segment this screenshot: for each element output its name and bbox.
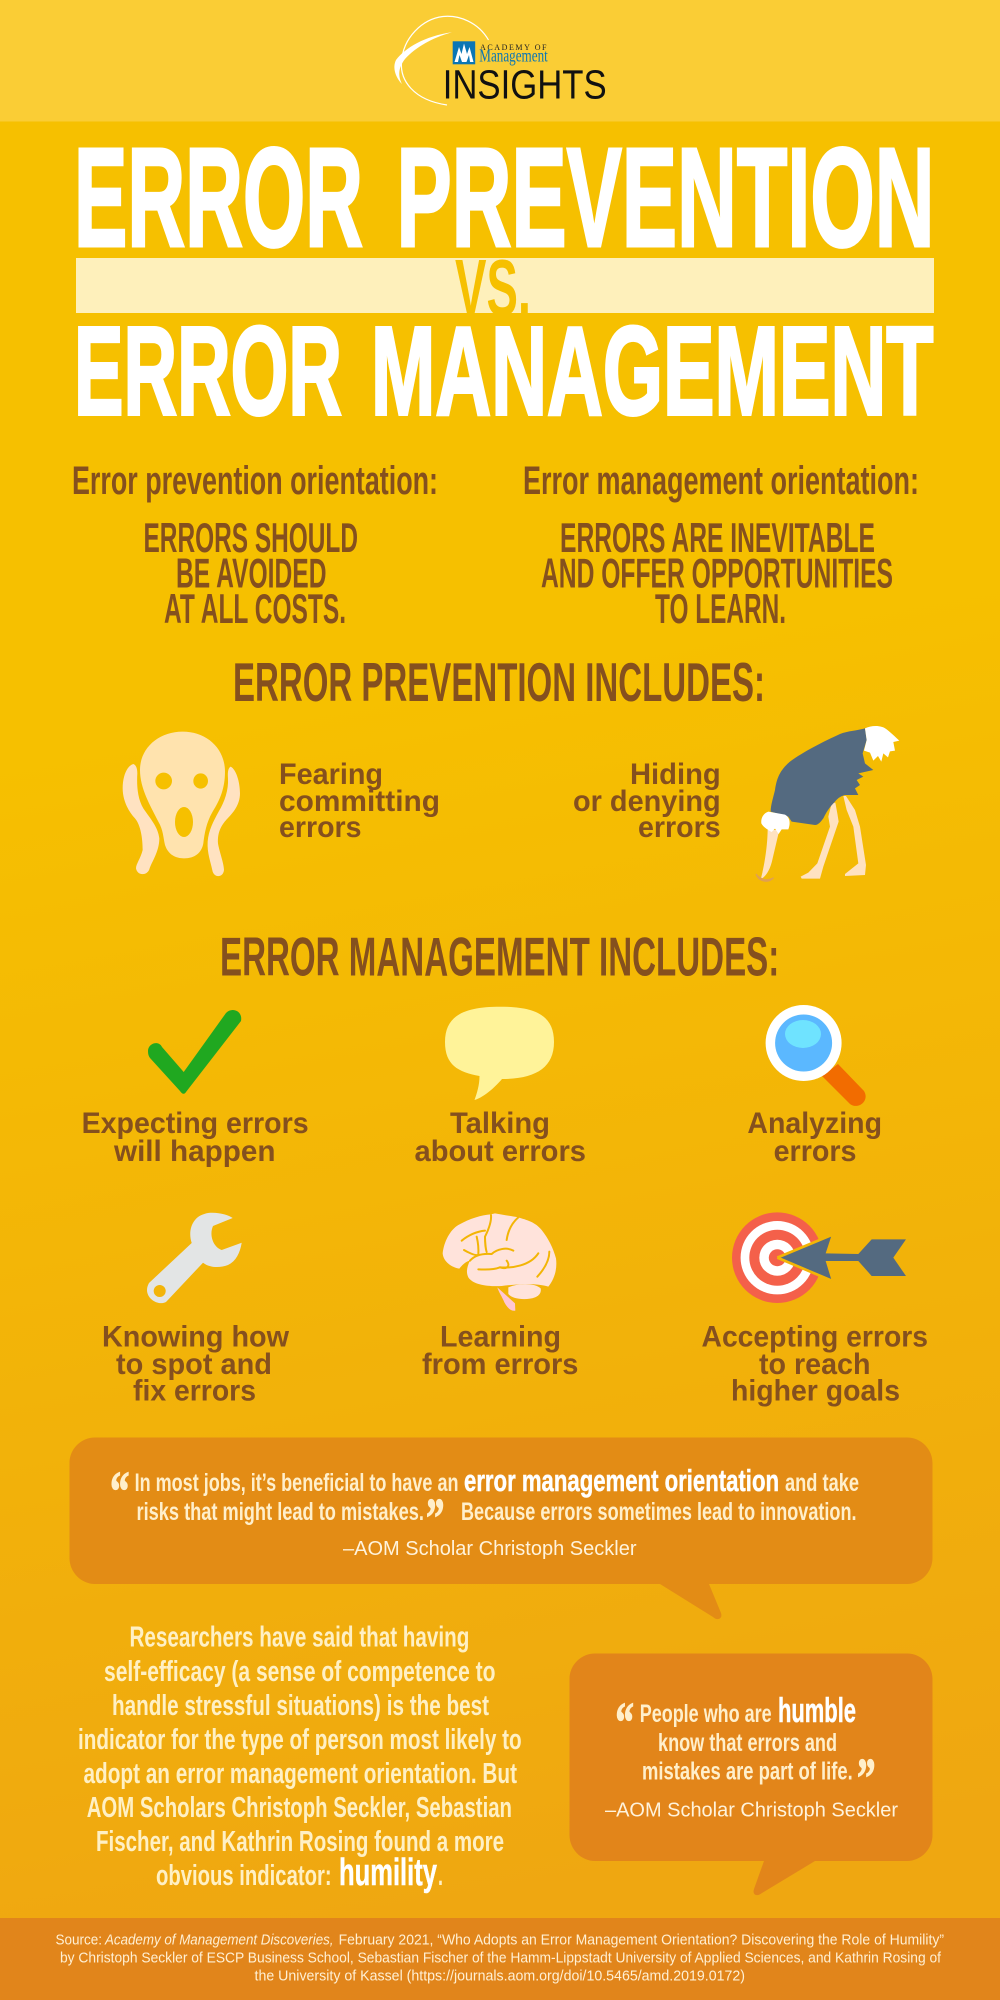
quote text: error management orientation (464, 1463, 779, 1498)
item: talking about errors (414, 1107, 586, 1168)
quote text: humble (778, 1692, 856, 1730)
icon: check mark (148, 1010, 241, 1094)
quote text: People who are (640, 1700, 772, 1728)
text: hiding or denying errors (573, 758, 721, 844)
quote text: ” (857, 1748, 876, 1810)
icon: magnifying glass (766, 1005, 866, 1106)
title: ERROR (74, 300, 342, 442)
orientation: error prevention: BE AVOIDED (176, 550, 326, 596)
item: analyzing errors: Analyzing (747, 1107, 882, 1140)
quote text (110, 1461, 859, 1550)
footer: source: Source: (56, 1932, 102, 1949)
orientation: error prevention: ERRORS SHOULD (144, 514, 358, 561)
item: accepting errors to reach higher goals: higher goals (731, 1375, 900, 1408)
quote text: know that errors and (658, 1729, 837, 1757)
footer: source: by Christoph Seckler of ESCP Business School, Sebastian Fischer of the Hamm-Lippstadt University of Applied Sciences, and Kathrin Rosing of (60, 1950, 942, 1967)
footer: source: the University of Kassel (https://journals.aom.org/doi/10.5465/amd.2019.0172) (254, 1968, 745, 1984)
logo wordmark: Management (479, 46, 548, 66)
icon: speech bubble (445, 1007, 554, 1100)
logo wordmark: ACADEMY OF (480, 43, 547, 52)
icon: ostrich with head in sand (756, 726, 899, 881)
quote text: ” (426, 1488, 444, 1550)
quote text: “ (110, 1461, 130, 1523)
icon: screaming face (123, 732, 240, 876)
quote text: In most jobs, it’s beneficial to have an (135, 1469, 458, 1497)
quote text: Because errors sometimes lead to innovation. (461, 1498, 856, 1526)
quote text: and take (785, 1469, 859, 1497)
item: learning from errors: Learning (440, 1321, 561, 1354)
header band with logo (0, 0, 1000, 122)
orientation: error prevention: AT ALL COSTS. (164, 585, 346, 632)
text: hiding or denying errors: Hiding (630, 758, 721, 791)
text block: researchers paragraph: indicator for the type of person most likely to (78, 1724, 522, 1756)
text: hiding or denying errors: or denying (573, 785, 721, 818)
item: talking about errors: Talking (450, 1107, 550, 1140)
item: accepting errors to reach higher goals: Accepting errors (702, 1321, 928, 1354)
text block: researchers paragraph: adopt an error management orientation. But (84, 1758, 517, 1790)
text block: researchers paragraph: Fischer, and Kathrin Rosing found a more (96, 1826, 504, 1858)
text: fearing committing errors (279, 758, 440, 844)
item: analyzing errors (747, 1107, 882, 1168)
orientation: error management: TO LEARN. (655, 585, 786, 632)
text block: researchers paragraph: obvious indicator: (156, 1860, 332, 1892)
quote attribution: –AOM Scholar Christoph Seckler (343, 1537, 637, 1560)
icon: brain (443, 1213, 556, 1311)
title: ERROR (74, 118, 363, 276)
item: analyzing errors: errors (774, 1135, 856, 1168)
icon: target with arrow (732, 1212, 906, 1303)
item: talking about errors: about errors (414, 1135, 586, 1168)
text block: researchers paragraph: . (438, 1860, 443, 1892)
panel: quote bubble two (570, 1654, 932, 1895)
footer: source (0, 1918, 1000, 2000)
item: knowing how to spot and fix errors (102, 1321, 290, 1408)
logo mark (453, 41, 475, 64)
quote text: “ (615, 1692, 634, 1754)
item: learning from errors (422, 1321, 578, 1381)
item: expecting errors: will happen (113, 1135, 276, 1168)
text: fearing committing errors: errors (279, 811, 362, 844)
text block: researchers paragraph: handle stressful situations) is the best (112, 1690, 489, 1722)
item: expecting errors (82, 1107, 309, 1168)
text: fearing committing errors: committing (279, 785, 440, 818)
text block: researchers paragraph: AOM Scholars Christoph Seckler, Sebastian (87, 1792, 512, 1824)
text block: researchers paragraph: self-efficacy (a sense of competence to (104, 1656, 496, 1688)
item: accepting errors to reach higher goals: to reach (759, 1348, 870, 1381)
title (74, 118, 934, 442)
text: hiding or denying errors: errors (638, 811, 721, 844)
item: accepting errors to reach higher goals (702, 1321, 928, 1408)
text block: researchers paragraph (78, 1621, 522, 1894)
quote attribution: –AOM Scholar Christoph Seckler (605, 1799, 898, 1822)
quote text: risks that might lead to mistakes. (136, 1498, 424, 1526)
text block: researchers paragraph: humility (339, 1852, 437, 1894)
orientation: error management (523, 459, 919, 632)
item: knowing how to spot and fix errors: fix errors (133, 1375, 256, 1408)
orientation: error prevention: Error prevention orientation: (72, 459, 438, 503)
text block: researchers paragraph: Researchers have said that having (130, 1621, 469, 1653)
logo wordmark: INSIGHTS (443, 61, 607, 107)
versus band (76, 243, 934, 332)
logo swoosh (394, 16, 488, 105)
footer: source: February 2021, “Who Adopts an Error Management Orientation? Discovering the Role of Humility” (339, 1932, 944, 1949)
versus band: VS. (455, 243, 531, 332)
item: knowing how to spot and fix errors: to spot and (116, 1348, 272, 1381)
quote text (615, 1692, 876, 1810)
panel: quote bubble one (70, 1438, 932, 1619)
text: fearing committing errors: Fearing (279, 758, 383, 791)
quote text: mistakes are part of life. (642, 1758, 853, 1786)
logo wordmark (443, 43, 607, 107)
item: expecting errors: Expecting errors (82, 1107, 309, 1140)
footer: source: Academy of Management Discoveries, (104, 1932, 334, 1949)
item: knowing how to spot and fix errors: Knowing how (102, 1321, 290, 1354)
orientation: error prevention (72, 459, 438, 632)
item: learning from errors: from errors (422, 1348, 578, 1381)
icon: wrench (147, 1213, 242, 1303)
